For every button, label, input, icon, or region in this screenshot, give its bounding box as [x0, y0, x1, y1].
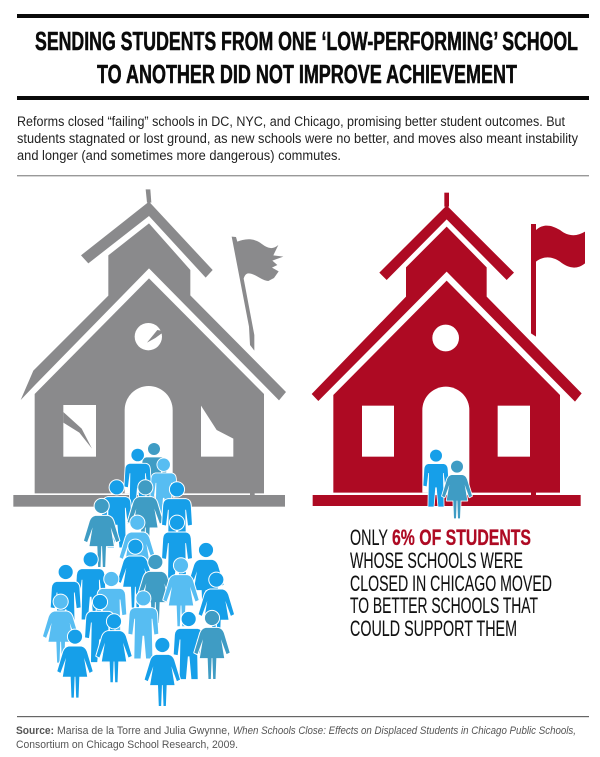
title [35, 26, 578, 89]
intro text: students stagnated or lost ground, as new schools were no better, and moves also meant instability [17, 131, 578, 146]
footer divider [17, 716, 589, 717]
broken flag [232, 237, 283, 351]
gray failing school [13, 189, 286, 507]
tower roof [81, 202, 213, 278]
broken right window [201, 406, 233, 457]
title bottom rule [17, 96, 589, 100]
door [422, 387, 469, 493]
main roof and tower [21, 223, 286, 400]
flag base post [250, 493, 255, 496]
main roof and tower [312, 227, 582, 402]
crowd of displaced students [43, 443, 234, 706]
spire [146, 189, 151, 203]
spire [444, 193, 449, 207]
intro text [17, 114, 578, 163]
divider [17, 175, 589, 176]
left window [362, 406, 394, 457]
top rule [17, 14, 589, 18]
clock window [432, 325, 459, 351]
right window [498, 406, 530, 457]
source note: Consortium on Chicago School Research, 2009. [16, 739, 238, 751]
boy [423, 450, 449, 507]
source note [16, 725, 576, 751]
intro text: and longer (and sometimes more dangerous) commutes. [17, 148, 341, 163]
school body [333, 281, 560, 493]
callout: COULD SUPPORT THEM [350, 616, 517, 641]
callout: 6% OF STUDENTS [392, 525, 531, 550]
source note: Marisa de la Torre and Julia Gwynne, [57, 725, 230, 737]
callout [350, 525, 552, 641]
ground slab [313, 495, 581, 506]
two students at the red school [423, 450, 472, 518]
callout: ONLY [350, 525, 388, 550]
clock [135, 323, 163, 350]
tower roof [379, 205, 514, 280]
flag base post [531, 492, 536, 496]
flag [531, 224, 585, 337]
door [125, 386, 173, 493]
ground slab [13, 495, 285, 507]
broken left window [63, 405, 96, 457]
girl [442, 461, 472, 518]
school body [35, 278, 264, 493]
red healthy school [312, 193, 585, 506]
intro text: Reforms closed “failing” schools in DC, NYC, and Chicago, promising better student outcomes. But [17, 114, 565, 129]
source note: Source: [16, 725, 54, 737]
